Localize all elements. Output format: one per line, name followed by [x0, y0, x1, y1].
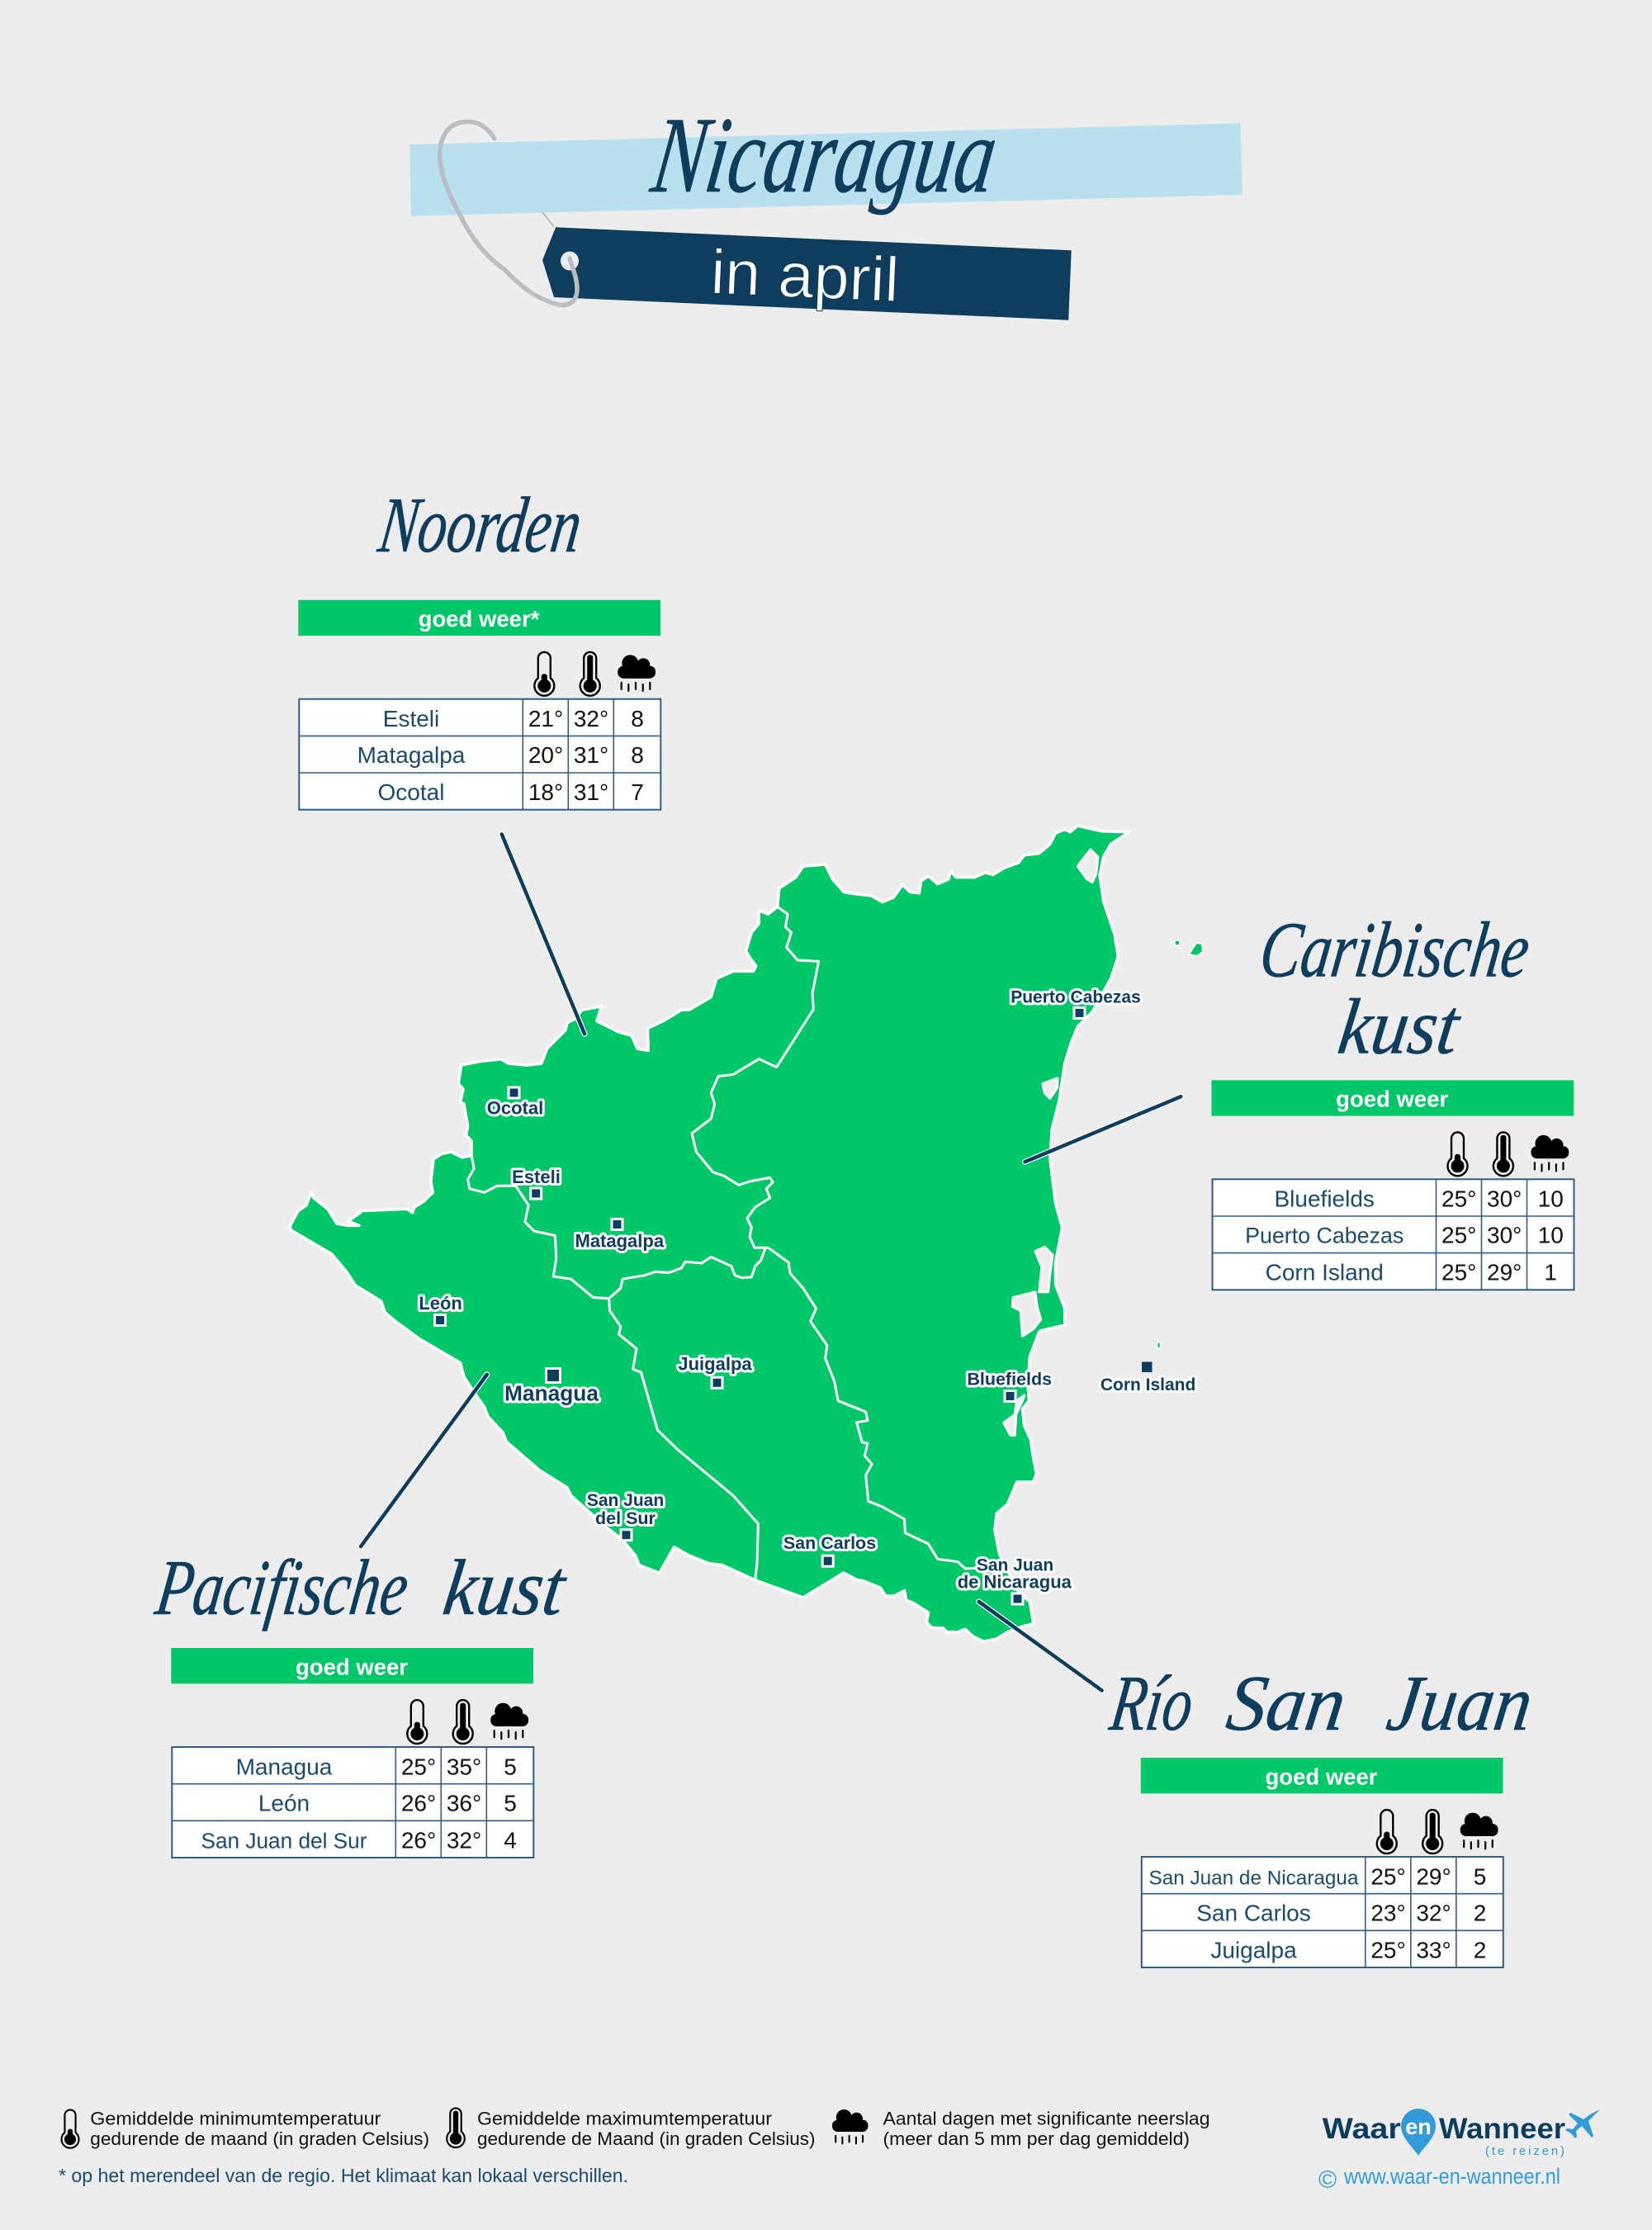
heading — [1255, 906, 1536, 1070]
data table: 5 — [504, 1754, 517, 1779]
data table: 7 — [631, 779, 644, 805]
data table: Matagalpa — [357, 742, 466, 768]
data table: 32° — [447, 1827, 481, 1853]
country shape — [290, 826, 1129, 1641]
legend item: rain days: Aantal dagen met significante neerslag — [883, 2108, 1210, 2128]
column icons — [1377, 1810, 1498, 1854]
city marker: San Juan de Nicaragua — [958, 1555, 1072, 1604]
heading: Río — [1105, 1659, 1199, 1747]
legend item: maximum temperature — [447, 2108, 816, 2149]
logo wordmark left: Waar — [1323, 2113, 1401, 2145]
city marker: San Carlos — [783, 1533, 876, 1566]
legend — [59, 2108, 1210, 2186]
data table: 29° — [1487, 1260, 1522, 1285]
data table: 10 — [1538, 1223, 1564, 1248]
city marker: Corn Island — [1101, 1362, 1195, 1394]
data table: 32° — [574, 706, 608, 731]
leader line: Noorden — [502, 834, 585, 1034]
status bar — [298, 600, 660, 636]
data table: 2 — [1474, 1937, 1486, 1962]
copyright and website — [1318, 2164, 1560, 2194]
data table: Juigalpa — [1210, 1937, 1297, 1962]
data table: San Juan del Sur — [201, 1828, 367, 1853]
city marker: San Juan del Sur — [587, 1491, 664, 1541]
data table: 25° — [1441, 1223, 1476, 1248]
heading: Pacifische — [150, 1543, 414, 1631]
legend item: minimum temperature: gedurende de maand (in graden Celsius) — [90, 2128, 429, 2149]
data table: 25° — [1370, 1937, 1406, 1962]
data table: León — [258, 1790, 310, 1816]
heading: Caribische — [1255, 906, 1536, 993]
status bar: goed weer — [1336, 1087, 1448, 1112]
data table — [172, 1747, 533, 1858]
column icons — [1448, 1132, 1569, 1176]
city marker: León — [419, 1293, 462, 1326]
data table: 30° — [1487, 1186, 1522, 1212]
status bar — [171, 1648, 533, 1683]
legend item: minimum temperature: Gemiddelde minimumtemperatuur — [90, 2108, 381, 2128]
panel: Noorden — [298, 481, 660, 810]
lagoons — [1004, 850, 1098, 1435]
city marker: Managua — [504, 1369, 599, 1406]
data table: Corn Island — [1266, 1260, 1384, 1285]
footnote: * op het merendeel van de regio. Het klimaat kan lokaal verschillen. — [59, 2165, 628, 2186]
data table: 26° — [401, 1827, 436, 1853]
data table — [1212, 1179, 1574, 1290]
string segment behind band — [542, 212, 554, 227]
data table: San Juan de Nicaragua — [1149, 1867, 1359, 1889]
data table: 32° — [1416, 1900, 1451, 1925]
icon: airplane — [1565, 2109, 1600, 2138]
city marker: Esteli: Esteli — [512, 1167, 561, 1187]
city marker: San Juan de Nicaragua: San Juan — [977, 1555, 1053, 1574]
legend item: maximum temperature: Gemiddelde maximumtemperatuur — [477, 2108, 772, 2128]
status bar: goed weer* — [419, 606, 540, 632]
data table: 36° — [447, 1790, 481, 1816]
data table: 2 — [1474, 1900, 1486, 1925]
legend item: rain days: (meer dan 5 mm per dag gemiddeld) — [883, 2128, 1190, 2149]
legend item: rain days — [832, 2108, 1210, 2149]
tag hole — [561, 251, 579, 271]
regional borders — [468, 907, 977, 1579]
city marker: Matagalpa: Matagalpa — [575, 1230, 665, 1251]
city marker: San Juan del Sur: San Juan — [587, 1491, 664, 1510]
data table: 31° — [574, 742, 608, 768]
status bar: goed weer — [1265, 1764, 1378, 1789]
data table: 30° — [1487, 1223, 1522, 1248]
status bar — [1212, 1080, 1574, 1116]
city marker: San Carlos: San Carlos — [783, 1533, 876, 1553]
data table: Esteli — [383, 706, 439, 731]
data table: Ocotal — [378, 779, 444, 805]
data table: 25° — [401, 1754, 436, 1779]
city marker: Bluefields — [967, 1370, 1052, 1402]
heading: kust — [1333, 982, 1466, 1070]
city marker: Corn Island: Corn Island — [1101, 1375, 1195, 1394]
heading: Juan — [1382, 1659, 1538, 1747]
panel: Caribische kust — [1212, 906, 1574, 1290]
tag string — [440, 121, 577, 305]
title band — [409, 123, 1243, 216]
data table: 35° — [447, 1754, 481, 1779]
data table: 20° — [528, 742, 563, 768]
city marker: Puerto Cabezas: Puerto Cabezas — [1011, 987, 1141, 1006]
column icons — [407, 1700, 528, 1744]
logo tagline: (te reizen) — [1485, 2144, 1564, 2158]
data table: 10 — [1538, 1186, 1564, 1212]
data table: 26° — [401, 1790, 436, 1816]
city marker: León: León — [419, 1293, 462, 1314]
data table: 29° — [1416, 1863, 1451, 1889]
city marker: Ocotal: Ocotal — [487, 1098, 543, 1119]
leader line: Pacifische kust — [361, 1375, 487, 1546]
title: Nicaragua: Nicaragua — [645, 95, 1005, 215]
data table: 25° — [1441, 1260, 1476, 1285]
city marker: San Juan del Sur: del Sur — [595, 1508, 656, 1528]
city marker: Managua: Managua — [504, 1381, 599, 1406]
heading — [1105, 1659, 1538, 1747]
luggage tag — [542, 227, 1072, 320]
data table: Bluefields — [1274, 1186, 1375, 1212]
data table: 31° — [574, 779, 608, 805]
city marker: Bluefields: Bluefields — [967, 1370, 1052, 1390]
data table: 23° — [1370, 1900, 1406, 1925]
city marker: Juigalpa: Juigalpa — [678, 1353, 752, 1374]
heading: San — [1222, 1659, 1351, 1747]
data table: 25° — [1370, 1863, 1406, 1889]
map pin — [1401, 2109, 1436, 2156]
column icons — [534, 652, 656, 696]
city marker: Esteli — [512, 1167, 561, 1199]
data table: 5 — [504, 1790, 517, 1816]
data table: 8 — [631, 742, 644, 768]
city marker: Ocotal — [487, 1087, 543, 1119]
panel: Río San Juan — [1105, 1659, 1538, 1967]
status bar: goed weer — [296, 1654, 408, 1679]
title banner — [409, 95, 1243, 320]
city marker: Juigalpa — [678, 1353, 752, 1388]
legend item: maximum temperature: gedurende de Maand (in graden Celsius) — [477, 2128, 816, 2149]
data table: 33° — [1416, 1937, 1451, 1962]
panel: Pacifische kust — [150, 1543, 572, 1858]
data table: San Carlos — [1196, 1900, 1311, 1925]
city marker: Matagalpa — [575, 1219, 665, 1251]
status bar — [1141, 1758, 1503, 1793]
data table — [1142, 1857, 1503, 1967]
offshore islands — [1157, 940, 1203, 1349]
subtitle: in april: in april — [709, 237, 901, 315]
logo: Waar en Wanneer — [1318, 2109, 1600, 2194]
data table: 21° — [528, 706, 563, 731]
city marker: Puerto Cabezas — [1011, 987, 1141, 1018]
logo wordmark right: Wanneer — [1439, 2113, 1565, 2145]
city marker: San Juan de Nicaragua: de Nicaragua — [958, 1571, 1072, 1592]
data table — [299, 699, 660, 810]
data table: Puerto Cabezas — [1245, 1224, 1403, 1248]
map pin: en — [1405, 2114, 1432, 2139]
data table: 25° — [1441, 1186, 1476, 1212]
data table: 8 — [631, 706, 644, 731]
legend item: minimum temperature — [61, 2108, 429, 2149]
data table: Managua — [236, 1754, 333, 1779]
heading: kust — [438, 1543, 572, 1631]
data table: 18° — [528, 779, 563, 805]
leader line: Río San Juan — [979, 1602, 1102, 1691]
data table: 4 — [504, 1827, 517, 1853]
map of Nicaragua — [290, 826, 1203, 1641]
copyright and website: www.waar-en-wanneer.nl — [1343, 2164, 1560, 2189]
heading: Noorden — [373, 481, 587, 569]
data table: 1 — [1544, 1260, 1557, 1285]
copyright and website: © — [1318, 2166, 1337, 2194]
data table: 5 — [1474, 1863, 1486, 1889]
leader line: Caribische kust — [1025, 1096, 1181, 1162]
